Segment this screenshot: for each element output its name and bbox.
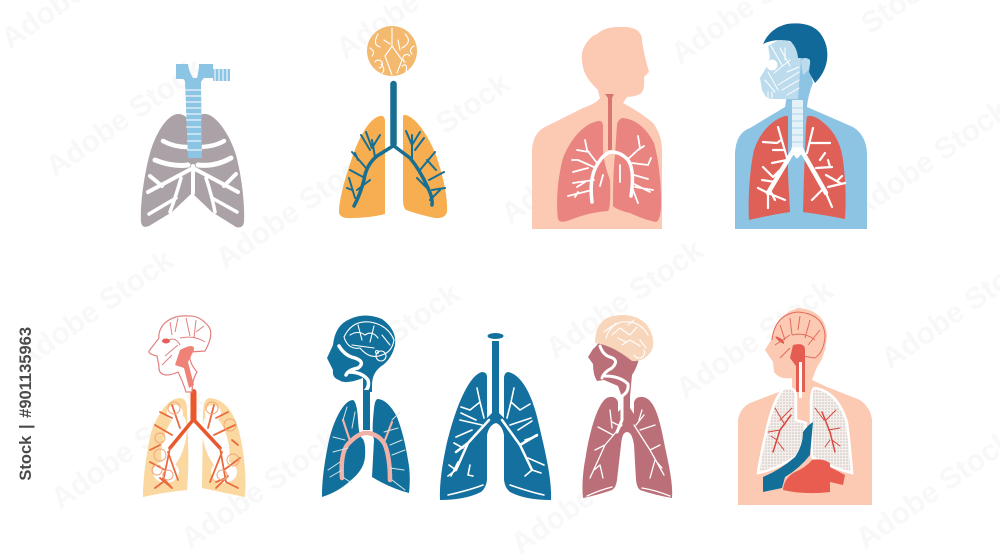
trachea (605, 94, 614, 150)
watermark text: Stock (430, 67, 516, 141)
dark hair (763, 23, 827, 83)
watermark text: Adobe Stock (540, 233, 709, 366)
pink lungs (557, 118, 661, 222)
blue head and neck (327, 316, 395, 392)
blue lungs and trachea (440, 341, 551, 500)
blue lungs (322, 399, 410, 497)
pink bronchial tree (328, 407, 405, 490)
icon: grey lungs with blue inhaler trachea (141, 64, 244, 227)
blue bronchial tree (347, 84, 445, 206)
white ribs and branches (148, 141, 238, 214)
face muscle lines (765, 46, 799, 98)
watermark text: Adobe Stock (40, 51, 209, 184)
trachea rings (792, 100, 803, 150)
blue inhaler (176, 64, 230, 158)
brain lines (604, 320, 648, 358)
watermark text: Adobe Stock (10, 243, 179, 376)
orange lungs (339, 115, 447, 218)
white lungs (758, 388, 852, 473)
red bronchi (768, 408, 840, 452)
peach body (738, 308, 872, 505)
icon: mauve head with lungs (582, 315, 672, 498)
head inner details (162, 318, 205, 365)
neck joining (363, 390, 370, 430)
blue body (735, 50, 867, 229)
red lungs (749, 116, 846, 220)
mauve lungs (582, 397, 672, 498)
white throat curve (600, 346, 628, 432)
head outline (149, 316, 211, 392)
orange bronchial tree (150, 392, 240, 488)
ear (801, 58, 810, 75)
icon: orange lungs with brain (339, 26, 447, 218)
icon: blue lungs with stem (440, 333, 551, 500)
brain lines (344, 322, 394, 361)
mauve head (588, 340, 640, 397)
watermark text: Stock (380, 277, 466, 351)
icon: blue man with red lungs (735, 23, 867, 229)
watermark text: Adobe (495, 150, 590, 231)
brain stem (775, 337, 805, 392)
brain outline (772, 312, 825, 358)
blue vessel (763, 422, 813, 492)
white branches (448, 388, 544, 495)
icon: blue head with lungs (322, 316, 410, 497)
white lung interior (153, 405, 237, 483)
watermark text: Adobe Stock (175, 423, 344, 556)
vertical stock id text: Stock | #901135963 (17, 327, 35, 481)
watermark text: Adobe Stock (45, 383, 214, 516)
white throat curve (339, 346, 368, 392)
watermark text: Adobe Stock (670, 273, 839, 406)
white bronchial tree (568, 136, 653, 203)
orange brain (367, 26, 417, 76)
red heart (783, 459, 845, 493)
watermark text: Adobe Stock (210, 143, 379, 276)
watermark text: Adobe (505, 480, 600, 560)
white bronchial tree (758, 127, 845, 208)
peach lungs (143, 398, 246, 497)
peach brain (595, 315, 653, 361)
grey lungs (141, 114, 244, 227)
peach body (532, 27, 662, 229)
white branches (587, 410, 670, 496)
icon: peach torso with lungs and heart (738, 308, 872, 505)
light face (760, 38, 801, 99)
trachea cap (488, 333, 504, 339)
icon: outlined head with peach lungs (143, 316, 246, 497)
icon: peach silhouette with pink lungs (532, 27, 662, 229)
